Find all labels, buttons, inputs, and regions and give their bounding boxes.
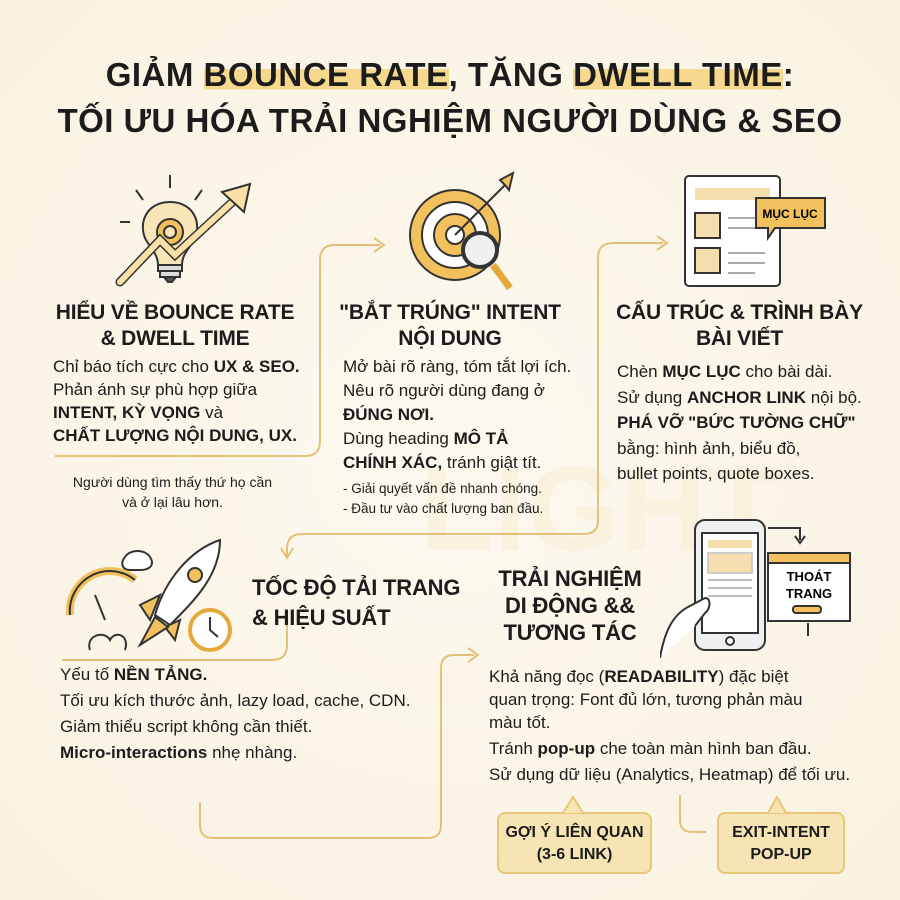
icon: lightbulb with gear and arrow: [116, 175, 252, 286]
watermark: LIGHT: [420, 442, 780, 576]
title: GIẢM BOUNCE RATE, TĂNG DWELL TIME:: [106, 56, 794, 93]
heading: mobile: TRẢI NGHIỆM: [498, 566, 642, 591]
text: mobile: quan trọng: Font đủ lớn, tương phản màu: [489, 690, 802, 709]
callout: related links: GỢI Ý LIÊN QUAN: [505, 824, 644, 841]
text: col 2: CHÍNH XÁC, tránh giật tít.: [343, 453, 541, 472]
text: col 2: ĐÚNG NƠI.: [343, 405, 434, 424]
callout: exit-intent: EXIT-INTENT: [732, 824, 830, 841]
text: col 2: Dùng heading MÔ TẢ: [343, 429, 508, 448]
text: col 3: Chèn MỤC LỤC cho bài dài.: [617, 362, 832, 381]
text: col 1: [53, 357, 300, 445]
heading: col 3: CẤU TRÚC & TRÌNH BÀY: [616, 301, 863, 324]
text: speed: [60, 665, 410, 762]
heading: col 1: [56, 300, 294, 350]
icon: phone with exit popup: TRANG: [786, 586, 832, 601]
title: TỐI ƯU HÓA TRẢI NGHIỆM NGƯỜI DÙNG & SEO: [57, 102, 843, 139]
heading: col 2: NỘI DUNG: [398, 327, 502, 350]
callout: exit-intent: POP-UP: [750, 846, 812, 863]
text: col 1: Chỉ báo tích cực cho UX & SEO.: [53, 357, 300, 376]
icon: document with MỤC LỤC bubble: MỤC LỤC: [762, 207, 818, 221]
heading: col 1: HIỂU VỀ BOUNCE RATE: [56, 301, 294, 324]
text: col 2: Nêu rõ người dùng đang ở: [343, 381, 545, 400]
bullets: col 2: [343, 481, 543, 516]
icon: document with MỤC LỤC bubble: [684, 175, 826, 287]
note: col 1: và ở lại lâu hơn.: [122, 494, 223, 510]
text: col 3: Sử dụng ANCHOR LINK nội bộ.: [617, 388, 862, 406]
icon: rocket with speedometer and clock: [66, 538, 232, 652]
icon: target with arrow and magnifier: [409, 171, 514, 290]
text: speed: Tối ưu kích thước ảnh, lazy load, cache, CDN.: [60, 691, 410, 710]
heading: col 2: [339, 300, 561, 350]
bullets: col 2: - Giải quyết vấn đề nhanh chóng.: [343, 481, 542, 496]
note: col 1: Người dùng tìm thấy thứ họ cần: [73, 474, 272, 490]
text: col 3: [617, 362, 862, 483]
callout: related links: (3-6 LINK): [537, 846, 612, 863]
callout: related links: [497, 812, 652, 874]
heading: col 3: [616, 300, 863, 350]
callout: exit-intent: [717, 812, 845, 874]
heading: col 3: BÀI VIẾT: [696, 327, 783, 350]
text: speed: Yếu tố NỀN TẢNG.: [60, 665, 207, 684]
text: mobile: Sử dụng dữ liệu (Analytics, Heatmap) để tối ưu.: [489, 765, 850, 784]
heading: mobile: [498, 566, 642, 645]
text: speed: Giảm thiểu script không cần thiết.: [60, 717, 312, 736]
text: mobile: Tránh pop-up che toàn màn hình ban đầu.: [489, 739, 812, 758]
text: col 2: Mở bài rõ ràng, tóm tắt lợi ích.: [343, 357, 571, 376]
text: col 3: PHÁ VỠ "BỨC TƯỜNG CHỮ": [617, 413, 856, 432]
text: col 1: INTENT, KỲ VỌNG và: [53, 403, 223, 422]
bullets: col 2: - Đầu tư vào chất lượng ban đầu.: [343, 501, 543, 516]
note: col 1: [73, 474, 272, 510]
text: col 1: Phản ánh sự phù hợp giữa: [53, 380, 257, 399]
text: col 3: bullet points, quote boxes.: [617, 464, 815, 483]
heading: col 1: & DWELL TIME: [101, 327, 249, 350]
text: speed: Micro-interactions nhẹ nhàng.: [60, 743, 297, 762]
heading: speed: & HIỆU SUẤT: [252, 605, 390, 630]
heading: mobile: TƯƠNG TÁC: [504, 620, 636, 645]
heading: col 2: "BẮT TRÚNG" INTENT: [339, 301, 561, 324]
heading: speed: TỐC ĐỘ TẢI TRANG: [252, 575, 460, 600]
text: mobile: Khả năng đọc (READABILITY) đặc biệt: [489, 667, 789, 686]
icon: phone with exit popup: THOÁT: [787, 569, 831, 584]
text: mobile: màu tốt.: [489, 713, 550, 732]
text: col 1: CHẤT LƯỢNG NỘI DUNG, UX.: [53, 426, 297, 445]
text: mobile: [489, 667, 850, 784]
title: [57, 56, 843, 139]
text: col 3: bằng: hình ảnh, biểu đồ,: [617, 438, 800, 458]
icon: phone with exit popup: [660, 519, 851, 658]
heading: mobile: DI ĐỘNG &&: [505, 593, 635, 618]
heading: speed: [252, 574, 460, 630]
text: col 2: [343, 357, 571, 472]
